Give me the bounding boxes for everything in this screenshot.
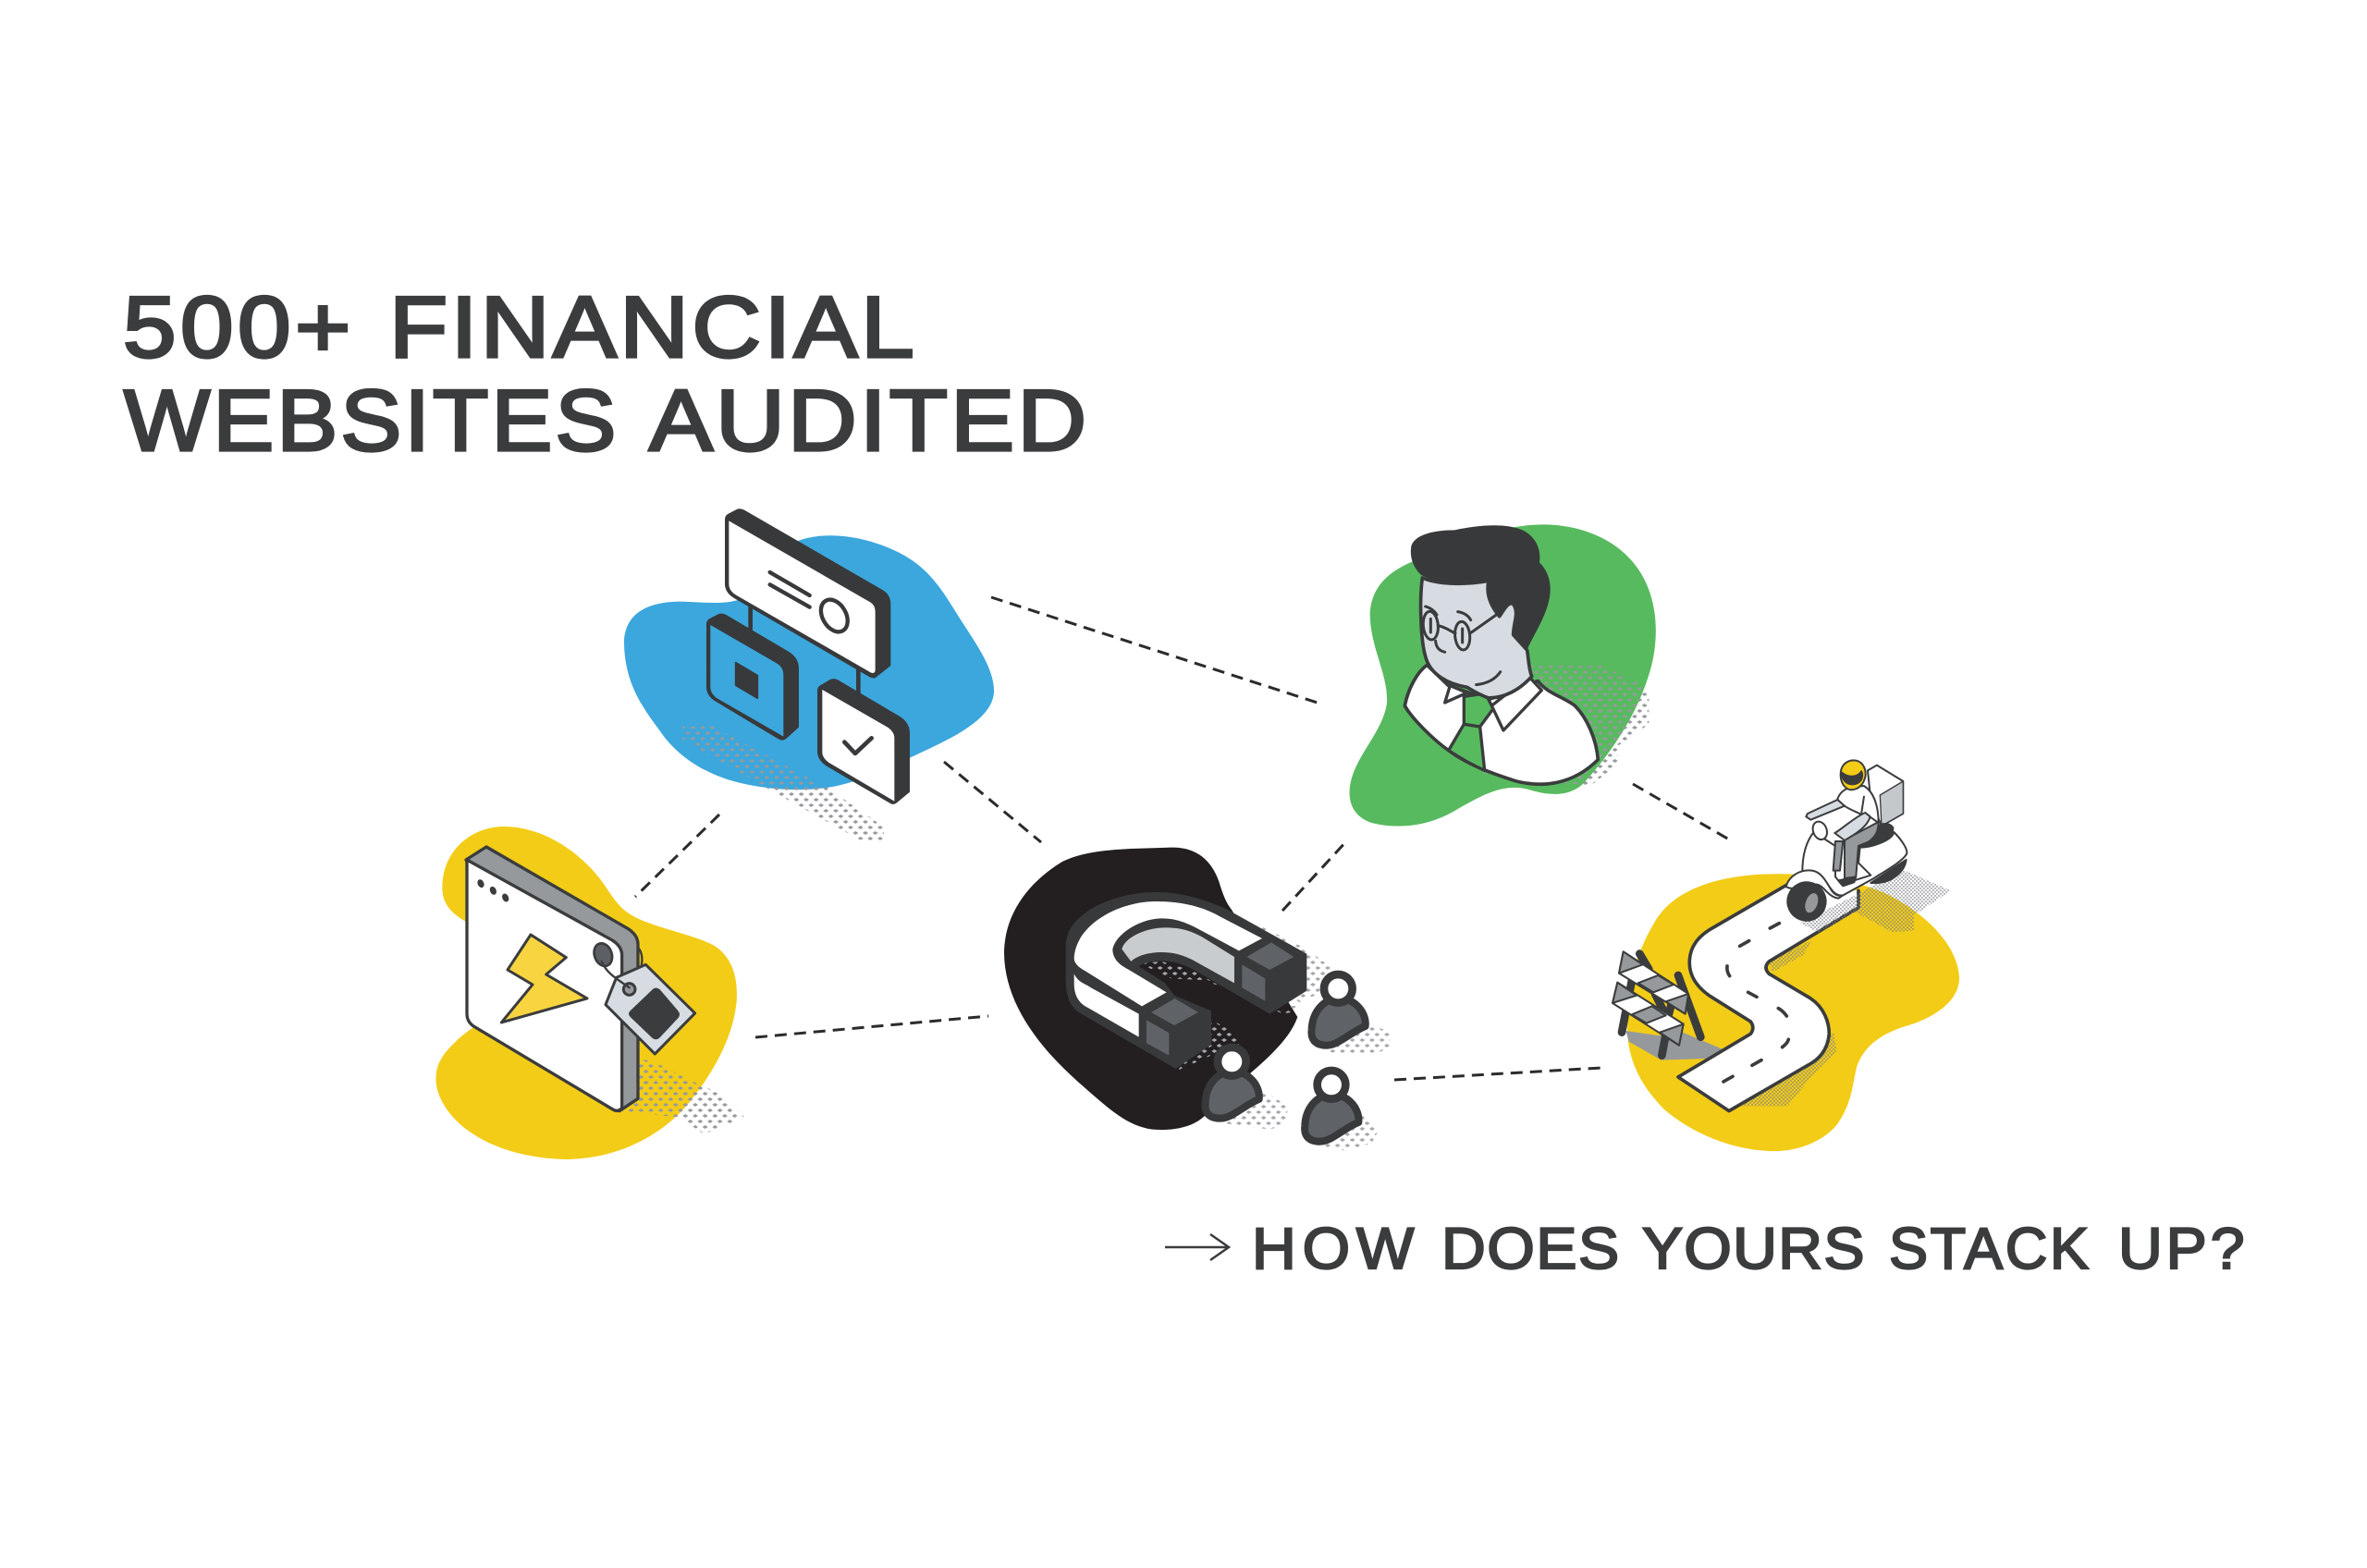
barrier shadow bbox=[1625, 1031, 1723, 1060]
shirt bbox=[1404, 665, 1598, 784]
delivery box bbox=[1868, 766, 1903, 826]
title: 500+ bbox=[123, 278, 350, 375]
call to action: STACK bbox=[1889, 1217, 2089, 1281]
call to action: UP? bbox=[2118, 1216, 2244, 1281]
illustration: road and scooter on yellow blob bbox=[1613, 760, 1959, 1151]
price tag bbox=[591, 941, 695, 1054]
yellow blob bbox=[1627, 874, 1959, 1151]
person 2 bbox=[1205, 1047, 1259, 1119]
scooter shadow halftone bbox=[1800, 869, 1951, 932]
legs bbox=[1834, 841, 1843, 871]
dashed connector lines bbox=[635, 597, 1729, 1080]
face bbox=[1421, 578, 1532, 698]
icon: arrow bbox=[1165, 1234, 1229, 1260]
left square panel bbox=[706, 614, 799, 741]
person 3 bbox=[1305, 1071, 1358, 1142]
arms bbox=[1806, 800, 1845, 820]
illustration: flowchart on blue blob bbox=[624, 508, 994, 841]
title: AUDITED bbox=[649, 372, 1086, 469]
road bbox=[1678, 885, 1858, 1111]
rear wheel bbox=[1870, 860, 1907, 883]
helmet bbox=[1841, 760, 1866, 790]
scooter and rider bbox=[1782, 760, 1907, 925]
blue blob bbox=[624, 535, 994, 790]
halftone shadow bbox=[682, 723, 885, 841]
green blob bbox=[1350, 524, 1656, 827]
headlight bbox=[1810, 819, 1830, 841]
fender bbox=[1786, 870, 1843, 899]
scooter body bbox=[1802, 832, 1907, 896]
top panel bbox=[725, 508, 890, 678]
window dots bbox=[476, 878, 510, 903]
hair bbox=[1411, 525, 1551, 650]
tag string back bbox=[636, 946, 642, 971]
browser face bbox=[467, 860, 622, 1110]
road shadow halftone bbox=[1735, 940, 1837, 1107]
black blob bbox=[1004, 848, 1297, 1130]
glasses bbox=[1422, 606, 1501, 685]
torso bbox=[1837, 786, 1879, 823]
halftone shadow bbox=[1479, 666, 1649, 786]
call to action: HOW bbox=[1252, 1216, 1414, 1281]
front wheel bbox=[1782, 876, 1831, 925]
title: FINANCIAL bbox=[389, 278, 914, 375]
call to action bbox=[1165, 1216, 2245, 1281]
title bbox=[123, 278, 1086, 469]
seat bbox=[1858, 824, 1893, 848]
check panel bbox=[817, 679, 910, 804]
magnet bbox=[1066, 892, 1306, 1069]
lightning bolt bbox=[501, 935, 587, 1023]
browser side bbox=[466, 847, 638, 1111]
tie bbox=[1449, 693, 1493, 770]
call to action: YOURS bbox=[1642, 1216, 1864, 1281]
illustration: magnet attracting people on black blob bbox=[1004, 848, 1390, 1151]
illustration: web page with lightning tag on yellow blob bbox=[435, 827, 744, 1159]
halftone shadow bbox=[622, 1059, 744, 1134]
halftone on blob bbox=[1139, 962, 1297, 1071]
connectors bbox=[751, 604, 858, 693]
halftone shadows bbox=[1251, 922, 1331, 1003]
call to action: DOES bbox=[1441, 1216, 1619, 1281]
illustration: businessman on green blob bbox=[1350, 524, 1656, 827]
collar bbox=[1445, 677, 1541, 730]
barricade bbox=[1613, 951, 1700, 1056]
person 1 bbox=[1311, 974, 1366, 1046]
title: WEBSITES bbox=[124, 373, 616, 469]
yellow blob bbox=[435, 827, 737, 1159]
